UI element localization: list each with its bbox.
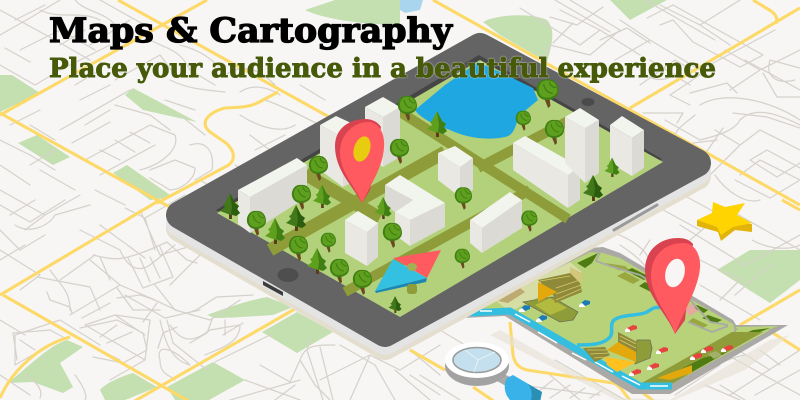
magnifying glass <box>445 342 542 400</box>
checker plot <box>708 351 722 359</box>
handle band <box>528 384 542 400</box>
gold star <box>697 202 752 241</box>
home button <box>278 268 298 282</box>
lower terrace block <box>583 332 652 372</box>
side button <box>614 205 657 230</box>
lens street lines <box>465 350 495 372</box>
red location pin on tablet <box>335 119 384 203</box>
title: Maps & Cartography <box>49 11 453 51</box>
neck <box>495 372 510 386</box>
houses <box>519 300 733 376</box>
screen city scene <box>217 60 663 317</box>
pink plot <box>683 304 698 316</box>
dark green strip <box>665 352 727 377</box>
lens rim back <box>445 346 509 386</box>
screen ground <box>217 60 663 317</box>
building 1 <box>320 116 362 187</box>
olive wedge <box>640 332 763 385</box>
building 8 <box>385 175 445 246</box>
tablet <box>180 47 697 346</box>
tablet shadow <box>180 60 697 346</box>
connector slot <box>263 281 283 296</box>
tablet cast shade on map <box>495 262 582 312</box>
building 10 <box>470 192 522 253</box>
building 4 <box>513 136 580 208</box>
building 2 <box>365 97 400 167</box>
tablet edge <box>180 55 697 341</box>
folded paper map <box>462 247 790 400</box>
grey garden paths <box>596 252 735 332</box>
building 5 <box>565 108 599 183</box>
small lake <box>400 0 423 13</box>
camera <box>582 98 594 106</box>
screen roads <box>270 110 570 292</box>
tablet face <box>180 47 697 333</box>
trees <box>220 79 620 313</box>
map paper shadow <box>490 330 790 400</box>
building 7 <box>238 158 307 233</box>
lake <box>415 62 538 139</box>
upper terrace block <box>523 267 582 322</box>
yellow pin centre <box>350 134 374 164</box>
parasol pavilion <box>375 250 441 294</box>
north gardens <box>577 253 778 332</box>
map land <box>470 252 770 384</box>
lens glass <box>453 348 501 372</box>
blue coast <box>470 311 672 386</box>
speckled field <box>498 288 525 303</box>
screen shadow <box>216 55 662 314</box>
subtitle: Place your audience in a beautiful experience <box>49 54 716 84</box>
handle <box>505 375 542 400</box>
white location pin on map <box>645 238 700 334</box>
gold corner field <box>657 365 692 380</box>
river <box>577 307 660 345</box>
lens rim <box>445 342 509 378</box>
building 6 <box>610 116 644 176</box>
building 3 <box>438 146 473 197</box>
coast road dashes <box>480 311 668 386</box>
buildings <box>238 97 644 266</box>
map border <box>462 247 788 394</box>
building 9 <box>345 211 378 266</box>
pin hole <box>662 257 688 289</box>
